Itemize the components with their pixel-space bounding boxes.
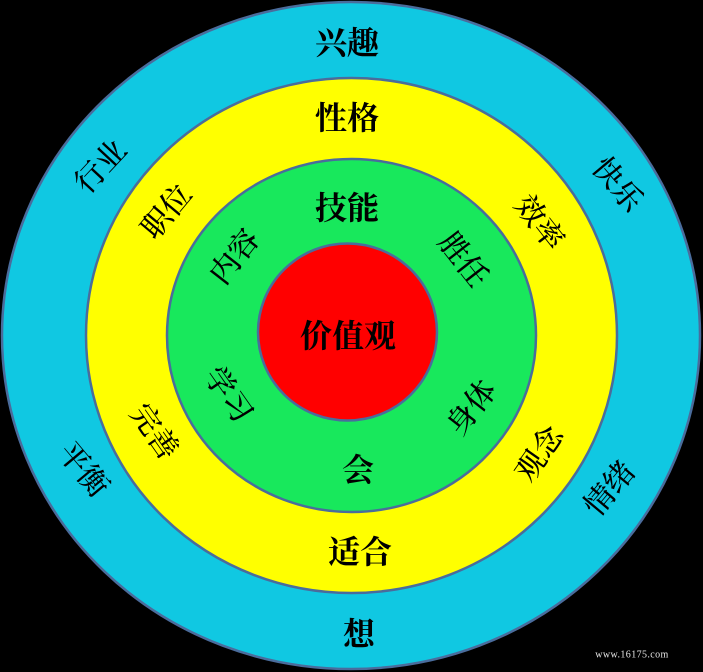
label: 行业: 行业 xyxy=(68,134,134,200)
label: 胜任: 胜任 xyxy=(432,226,494,294)
label: 观念: 观念 xyxy=(509,419,571,488)
label: 职位: 职位 xyxy=(135,178,199,246)
label: 会: 会 xyxy=(342,452,374,488)
inner ring: green xyxy=(167,159,536,512)
label: 想: 想 xyxy=(343,616,377,652)
label: 技能: 技能 xyxy=(315,190,379,226)
watermark: www.16175.com xyxy=(595,650,669,660)
label: 完善: 完善 xyxy=(123,398,185,466)
label: 平衡: 平衡 xyxy=(51,436,115,504)
label: 价值观: 价值观 xyxy=(300,318,396,354)
label: 兴趣: 兴趣 xyxy=(315,25,380,61)
label: 情绪: 情绪 xyxy=(578,455,642,523)
label: 性格: 性格 xyxy=(315,100,379,136)
label: 效率: 效率 xyxy=(508,189,570,257)
label: 内容: 内容 xyxy=(204,223,266,291)
core circle: red xyxy=(258,244,437,420)
middle ring: yellow xyxy=(86,78,617,593)
label: 快乐: 快乐 xyxy=(585,151,650,219)
label: 学习: 学习 xyxy=(197,361,259,429)
label: 适合: 适合 xyxy=(328,534,392,570)
label: 身体: 身体 xyxy=(441,374,503,442)
